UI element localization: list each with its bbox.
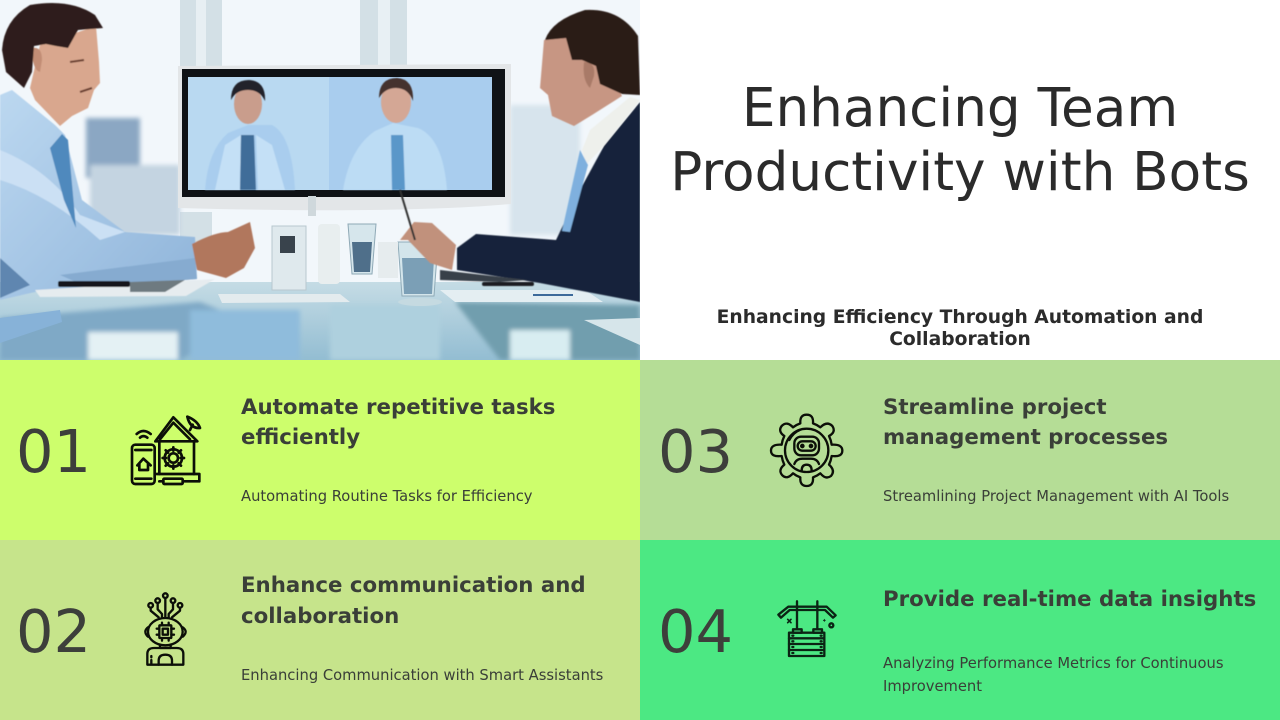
subtitle: Enhancing Efficiency Through Automation and	[717, 307, 1203, 328]
description 03: Streamlining Project Management with AI Tools	[883, 488, 1229, 505]
icon: robot head with circuit	[144, 592, 187, 666]
monitor stand and desk objects	[272, 196, 442, 306]
left man	[0, 3, 255, 300]
title: Enhancing Team	[742, 77, 1178, 139]
heading 02: Enhance communication and	[241, 573, 586, 598]
screen person 1	[205, 80, 295, 190]
heading 03	[883, 394, 1168, 450]
icon: data server on stand	[777, 600, 837, 658]
number 03: 03	[658, 417, 733, 486]
right man	[400, 10, 640, 302]
heading 01: efficiently	[241, 425, 360, 450]
number 01: 01	[16, 417, 91, 486]
description 04	[883, 655, 1224, 695]
panel: item 04	[640, 540, 1280, 720]
heading 03: management processes	[883, 425, 1168, 450]
description 04: Analyzing Performance Metrics for Continuous	[883, 655, 1224, 672]
photo: business video conference	[0, 0, 640, 360]
table	[0, 282, 640, 360]
subtitle: Collaboration	[889, 329, 1031, 350]
heading 02	[241, 573, 586, 628]
heading 04: Provide real-time data insights	[883, 587, 1256, 612]
title: Productivity with Bots	[670, 141, 1250, 203]
description 01: Automating Routine Tasks for Efficiency	[241, 488, 532, 505]
description 02: Enhancing Communication with Smart Assistants	[241, 667, 603, 684]
panel: item 02	[0, 540, 640, 720]
heading 02: collaboration	[241, 604, 399, 628]
panel: item 01	[0, 360, 640, 540]
window frames	[180, 0, 407, 242]
heading 01: Automate repetitive tasks	[241, 394, 555, 420]
subtitle	[717, 307, 1203, 350]
panel: item 03	[640, 360, 1280, 540]
description 04: Improvement	[883, 678, 982, 695]
heading 01	[241, 394, 555, 450]
title	[670, 77, 1250, 203]
number 02: 02	[16, 597, 91, 666]
tablet and notepad on table	[0, 290, 640, 345]
icon: smart home	[130, 415, 202, 486]
screen person 2	[343, 78, 447, 190]
skyline and blinds	[86, 105, 580, 235]
icon: robot in gear	[770, 414, 844, 488]
heading 03: Streamline project	[883, 394, 1107, 420]
monitor	[178, 64, 511, 210]
number 04: 04	[658, 597, 733, 666]
